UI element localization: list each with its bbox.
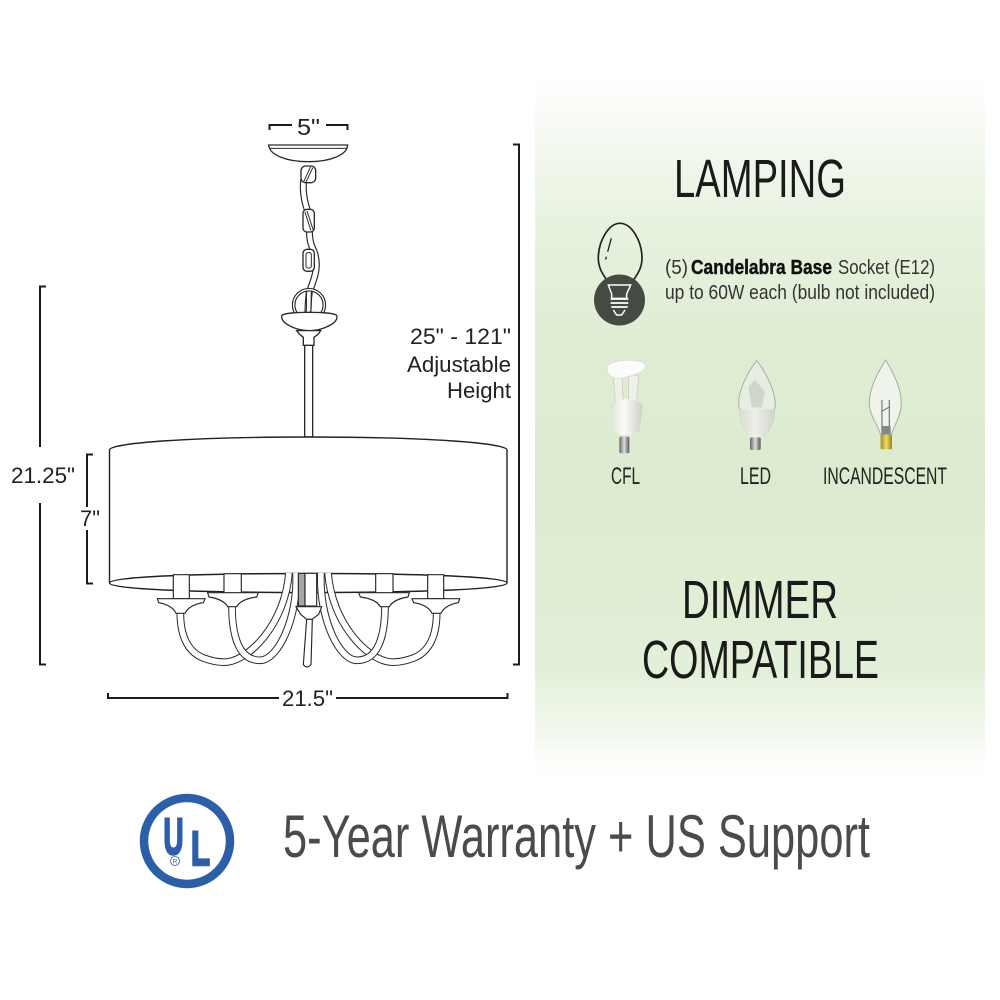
label: CFL: CFL bbox=[611, 463, 640, 490]
center rod bbox=[305, 345, 313, 437]
dimension: fixture height bbox=[11, 286, 75, 664]
text: socket specification: up to 60W each (bulb not included) bbox=[665, 281, 935, 304]
dimension: shade height bbox=[80, 454, 100, 584]
icon: LED bulb bbox=[739, 361, 775, 450]
icon: UL certification logo: R bbox=[173, 858, 178, 866]
dimension: 5 inch bbox=[270, 114, 348, 140]
heading: dimmer compatible bbox=[642, 570, 879, 690]
heading: dimmer compatible: COMPATIBLE bbox=[642, 630, 879, 690]
panel: lamping background bbox=[535, 80, 985, 775]
loop cup bbox=[282, 312, 337, 331]
icon: candelabra bulb bbox=[594, 223, 645, 326]
chandelier line drawing: right arms and candles bbox=[321, 573, 460, 662]
text: socket specification: Candelabra Base bbox=[691, 256, 832, 279]
dimension: shade width: 21.5" bbox=[282, 686, 333, 711]
icon: CFL bulb bbox=[607, 360, 646, 453]
icon: incandescent bulb bbox=[869, 360, 901, 449]
dimension: adjustable height label: Adjustable bbox=[407, 352, 511, 377]
dimension: shade height: 7" bbox=[80, 506, 100, 531]
canopy bbox=[269, 145, 348, 162]
chandelier line drawing: center finial bbox=[296, 573, 322, 667]
chain bbox=[294, 166, 324, 320]
text: socket specification: Socket (E12) bbox=[838, 256, 935, 279]
label: LED: LED bbox=[740, 463, 771, 490]
dimension: adjustable height label: Height bbox=[447, 378, 511, 403]
dimension: adjustable height label bbox=[407, 324, 511, 403]
dimension: overall height bracket bbox=[513, 144, 519, 664]
text: socket specification: (5) bbox=[665, 256, 688, 279]
icon: UL certification logo bbox=[144, 798, 230, 884]
dimension: adjustable height label: 25" - 121" bbox=[410, 324, 511, 349]
heading: dimmer compatible: DIMMER bbox=[682, 570, 838, 630]
heading: lamping: LAMPING bbox=[674, 149, 846, 209]
text: socket specification bbox=[665, 256, 935, 304]
chandelier line drawing: left arms and candles bbox=[157, 573, 296, 662]
dimension: 5 inch: 5" bbox=[297, 114, 320, 140]
dimension: shade width bbox=[108, 686, 508, 711]
chandelier line drawing: upper hardware bbox=[269, 145, 348, 437]
icon: UL certification logo: L bbox=[191, 823, 210, 876]
chandelier line drawing: shade bbox=[110, 437, 507, 592]
icon: UL certification logo: U bbox=[164, 808, 184, 865]
dimension: fixture height: 21.25" bbox=[11, 463, 75, 488]
